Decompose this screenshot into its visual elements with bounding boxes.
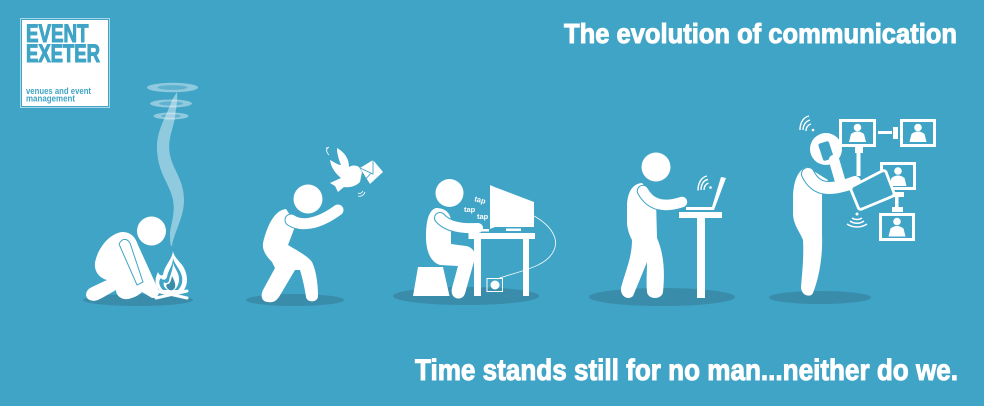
video panel 1 xyxy=(840,120,874,146)
laptop xyxy=(686,177,726,210)
head xyxy=(642,152,670,182)
head xyxy=(436,179,464,207)
body xyxy=(262,209,318,302)
figure 4: man at standing desk with laptop xyxy=(589,152,735,306)
arm xyxy=(440,218,478,228)
body xyxy=(621,183,664,298)
smoke rings xyxy=(147,83,198,120)
keyboard xyxy=(481,229,489,232)
campfire xyxy=(156,251,187,298)
phone xyxy=(818,141,834,161)
title: The evolution of communication xyxy=(564,18,957,49)
arm xyxy=(643,191,682,205)
body xyxy=(86,232,159,301)
video panel 3 xyxy=(882,164,914,188)
ground shadow 1 xyxy=(83,294,193,306)
icon: tablet wifi xyxy=(847,212,867,227)
icon: wifi xyxy=(698,176,712,190)
figure 2: man releasing carrier pigeon xyxy=(246,147,383,306)
icon: phone wifi xyxy=(800,116,814,131)
logo: Event Exeter: venues and event xyxy=(26,86,91,96)
logo: Event Exeter: EVENT xyxy=(26,20,88,48)
arm xyxy=(291,210,337,224)
power socket xyxy=(487,278,502,292)
body xyxy=(426,208,475,299)
icon: dove with envelope xyxy=(327,147,383,196)
head xyxy=(137,216,166,246)
stool xyxy=(413,267,450,296)
logo: Event Exeter xyxy=(20,18,110,108)
video panel 4 xyxy=(880,214,914,240)
ground shadow 5 xyxy=(769,291,871,304)
desk xyxy=(468,233,535,296)
connectors xyxy=(855,127,904,212)
tap labels xyxy=(464,194,489,221)
smoke trail xyxy=(157,92,184,246)
cable xyxy=(497,216,556,279)
standing desk xyxy=(679,212,722,298)
head xyxy=(294,184,322,214)
ground shadow 2 xyxy=(246,294,344,306)
logo: Event Exeter: management xyxy=(26,94,75,104)
video panel 2 xyxy=(902,120,934,146)
logo: Event Exeter: EXETER xyxy=(26,40,100,68)
arm to phone xyxy=(834,160,841,184)
arm to tablet xyxy=(808,174,855,188)
ground shadow 4 xyxy=(589,288,735,306)
head xyxy=(810,133,842,165)
tap labels: tap xyxy=(464,205,476,214)
body xyxy=(793,167,828,296)
figure 5: man with phone, tablet and video network xyxy=(769,116,934,304)
tablet xyxy=(851,171,894,209)
figure 1: man making smoke signals xyxy=(83,83,198,306)
ground shadow 3 xyxy=(393,287,539,305)
tap labels: tap xyxy=(473,194,487,206)
monitor xyxy=(490,185,534,229)
arm xyxy=(119,239,143,285)
figure 3: man at desktop computer xyxy=(393,179,556,305)
tap labels: tap xyxy=(477,212,489,221)
monitor stand xyxy=(506,228,521,231)
